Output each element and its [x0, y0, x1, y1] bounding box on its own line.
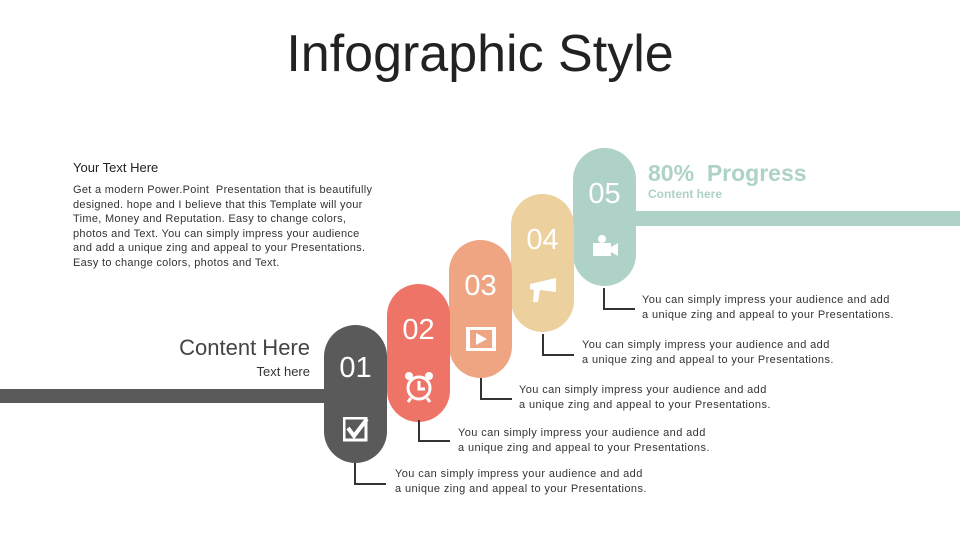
title: Infographic Style — [286, 25, 674, 83]
teal bar — [620, 211, 960, 226]
connector + text 03 — [480, 378, 512, 400]
pill 04: 04 — [526, 224, 559, 256]
icon: camera — [593, 235, 618, 256]
pill 03: 03 — [464, 270, 497, 302]
connector + text 02 — [418, 420, 450, 442]
content here heading: Text here — [257, 364, 310, 379]
icon: checkbox — [343, 417, 368, 442]
text: a unique zing and appeal to your Presentations. — [458, 442, 710, 454]
gray bar — [0, 389, 340, 403]
connector + text 01 — [354, 463, 386, 485]
pill 01: 01 — [339, 352, 372, 384]
text: You can simply impress your audience and add — [519, 384, 767, 396]
progress heading: 80% Progress — [648, 160, 807, 186]
text: You can simply impress your audience and add — [395, 468, 643, 480]
pill 05 — [573, 148, 636, 286]
pill 01 — [324, 325, 387, 463]
pill 02 — [387, 284, 450, 422]
icon: video — [466, 327, 496, 351]
text: a unique zing and appeal to your Presentations. — [642, 308, 894, 320]
icon: alarm clock — [405, 372, 433, 403]
pill 02: 02 — [402, 314, 435, 346]
pill 05: 05 — [588, 178, 621, 210]
progress heading: Content here — [648, 187, 722, 201]
connector + text 04 — [542, 334, 574, 356]
text block: your text here: Your Text Here — [73, 160, 158, 175]
text: a unique zing and appeal to your Presentations. — [395, 482, 647, 494]
pill 04 — [511, 194, 574, 332]
content here heading — [179, 335, 310, 379]
pill 03 — [449, 240, 512, 378]
icon: megaphone — [530, 278, 556, 302]
text: You can simply impress your audience and add — [642, 294, 890, 306]
connector + text 05 — [603, 288, 635, 310]
text: You can simply impress your audience and add — [582, 339, 830, 351]
content here heading: Content Here — [179, 335, 310, 360]
progress heading — [648, 160, 807, 201]
text: a unique zing and appeal to your Presentations. — [519, 398, 771, 410]
text block: your text here: Get a modern Power.Point Presentation that is beautifully designed. hope and I believe that this Template will your Time, Money and Reputation. Easy to change colors, photos and Text. You can simply impress your audience and add a unique zing and appeal to your Presentations. Easy to change colors, photos and Text. — [73, 184, 372, 269]
text: a unique zing and appeal to your Presentations. — [582, 354, 834, 366]
text: You can simply impress your audience and add — [458, 427, 706, 439]
